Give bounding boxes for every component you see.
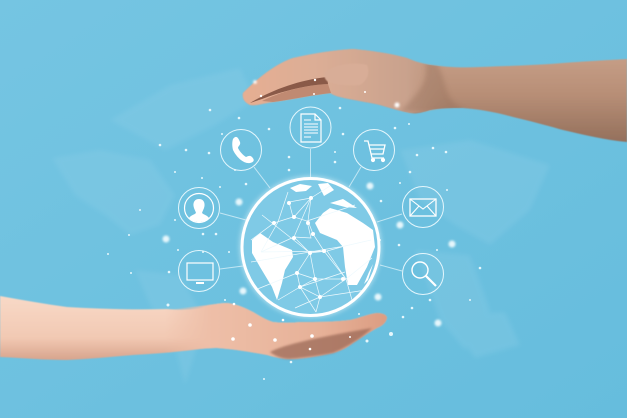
faint world map <box>52 68 550 385</box>
icon: magnifying glass <box>402 254 444 294</box>
icon: shopping cart <box>354 130 394 170</box>
globe network lines <box>251 186 372 312</box>
upper hand finger gap shadow <box>250 77 328 103</box>
globe continents <box>252 183 375 300</box>
lower hand and forearm <box>0 296 387 360</box>
upper hand thumb <box>324 64 368 85</box>
scattered light particles <box>107 107 481 380</box>
connector lines <box>220 149 402 271</box>
lower hand finger shading <box>270 328 372 359</box>
icon: document <box>290 107 331 148</box>
globe <box>240 176 382 318</box>
icon: monitor <box>178 250 220 292</box>
upper arm wrist shading <box>402 64 463 113</box>
icon: person <box>178 188 220 228</box>
icon: envelope <box>402 186 444 228</box>
icon: telephone <box>220 130 262 170</box>
globe rim <box>242 178 379 316</box>
upper hand and forearm <box>243 49 627 142</box>
upper hand lower finger <box>262 84 331 102</box>
globe network nodes <box>272 196 345 299</box>
